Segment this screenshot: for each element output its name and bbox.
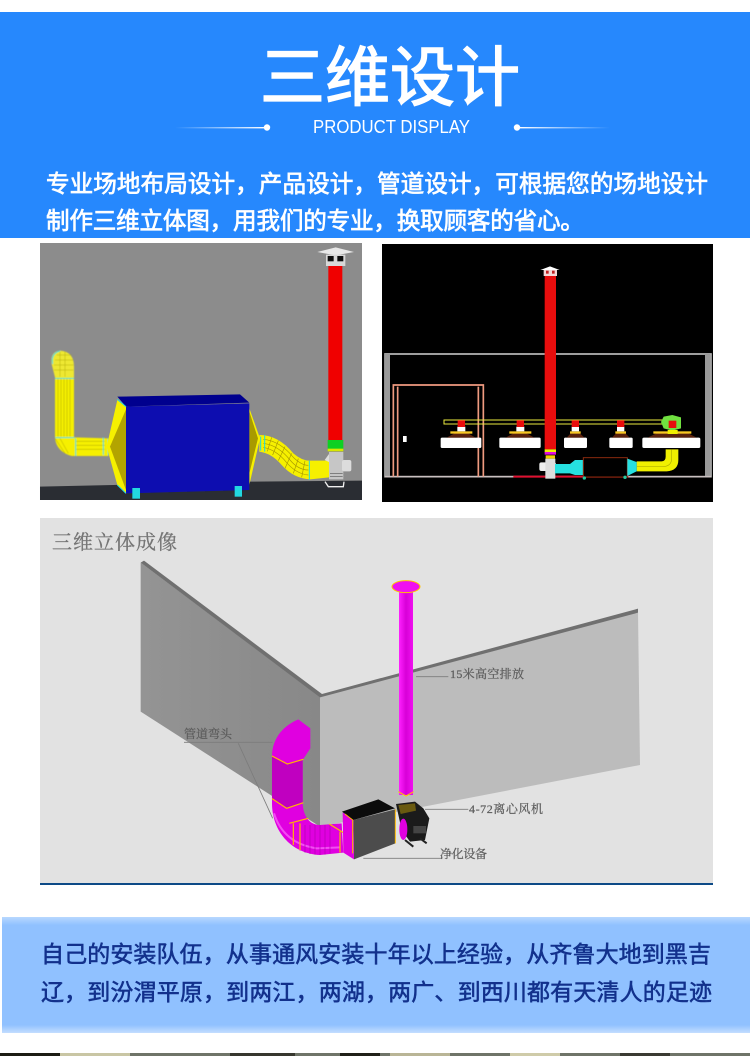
panel: black CAD side view (382, 244, 713, 502)
panel caption: 三维立体成像 (52, 531, 177, 554)
intro text: 制作三维立体图，用我们的专业，换取顾客的省心。 (46, 208, 584, 235)
leader lines (184, 677, 468, 858)
walls (141, 561, 640, 827)
right yellow flexible duct (259, 435, 329, 480)
banner text (41, 941, 712, 1005)
callout labels: 管道弯头 (184, 726, 233, 741)
banner text: 辽，到汾渭平原，到两江，两湖，两广、到西川都有天清人的足迹 (41, 979, 712, 1005)
subtitle with dotted rules: PRODUCT DISPLAY (313, 117, 470, 137)
title: 三维设计 (260, 41, 520, 114)
cyan ducts and purifier (555, 458, 637, 480)
left yellow duct (51, 351, 108, 456)
panel: yellow duct 3D model on grey (40, 243, 362, 500)
room outline (384, 354, 711, 477)
callout labels: 15米高空排放 (450, 666, 524, 681)
intro text: 专业场地布局设计，产品设计，管道设计，可根据您的场地设计 (46, 171, 708, 198)
callout labels (184, 666, 543, 861)
blue purifier box (107, 394, 260, 499)
subtitle with dotted rules (175, 117, 610, 137)
magenta U-shaped duct (272, 719, 343, 855)
callout labels: 4-72离心风机 (469, 801, 543, 816)
panel: 3D rendering on corner walls (40, 518, 713, 885)
exhaust stack and fan (317, 247, 354, 487)
cropped photo strip at page bottom (0, 1053, 750, 1056)
centrifugal fan (396, 802, 429, 847)
hoods row (441, 420, 700, 448)
stack (539, 266, 560, 479)
black purifier box (342, 799, 395, 859)
stack in magenta (392, 581, 420, 796)
yellow elbow and duct (637, 415, 681, 471)
banner text: 自己的安装队伍，从事通风安装十年以上经验，从齐鲁大地到黑吉 (41, 941, 711, 967)
door (393, 385, 483, 477)
horizontal yellow pipe (444, 420, 664, 424)
callout labels: 净化设备 (440, 846, 487, 861)
installation team banner (2, 917, 750, 1033)
intro text (46, 171, 708, 235)
header banner (0, 12, 750, 238)
